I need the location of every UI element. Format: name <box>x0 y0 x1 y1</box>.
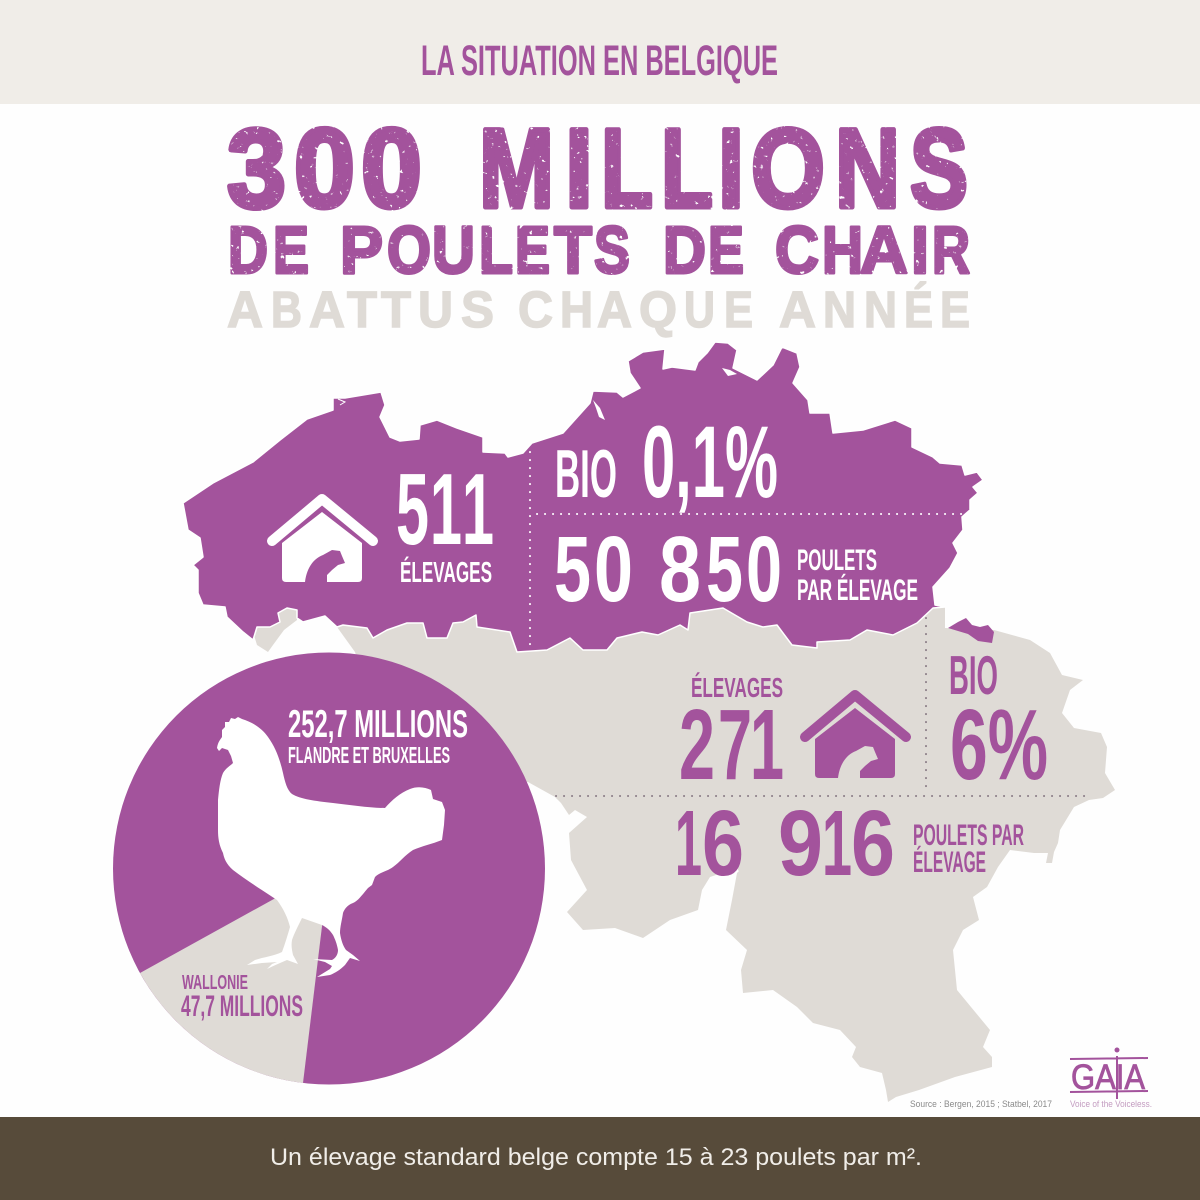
farms count: 2 <box>679 689 715 801</box>
subtitle line: A <box>309 281 345 338</box>
chickens per farm: 5 <box>554 517 591 621</box>
dotted dividers <box>556 618 1091 796</box>
chickens per farm label: ÉLEVAGE <box>913 845 986 879</box>
title lines: L <box>479 213 513 288</box>
title lines: O <box>751 106 825 231</box>
title lines: D <box>228 213 268 288</box>
logo: GAIA: Voice of the Voiceless. <box>1070 1099 1152 1109</box>
region: Comines enclave <box>253 608 297 652</box>
title lines: A <box>860 213 908 288</box>
title lines: E <box>708 213 744 288</box>
bottom banner <box>0 1117 1200 1200</box>
subtitle line: U <box>418 281 453 338</box>
title lines: R <box>932 213 970 288</box>
subtitle line: N <box>864 281 897 338</box>
subtitle line: Q <box>639 281 677 338</box>
subtitle line: A <box>779 281 816 338</box>
title lines: 0 <box>361 106 422 231</box>
chickens per farm label: PAR ÉLEVAGE <box>797 573 918 607</box>
title lines: H <box>822 213 863 288</box>
subtitle line: S <box>461 281 494 338</box>
subtitle line: A <box>227 281 263 338</box>
title lines: 0 <box>294 106 355 231</box>
island detail <box>722 368 737 376</box>
panel: Flanders statistics <box>272 405 962 646</box>
title lines: N <box>835 106 900 231</box>
title lines: L <box>661 106 713 231</box>
farms label: ÉLEVAGES <box>691 672 783 703</box>
title lines: P <box>340 213 383 288</box>
subtitle line: B <box>271 281 302 338</box>
organic label: BIO <box>555 436 617 512</box>
banner heading: LA SITUATION EN BELGIQUE <box>421 37 778 85</box>
bottom statement: Un élevage standard belge compte 15 à 23 poulets par m². <box>270 1144 922 1171</box>
icon: chicken house <box>272 499 373 582</box>
source note: Source : Bergen, 2015 ; Statbel, 2017 <box>910 1099 1052 1110</box>
chickens per farm label <box>797 544 918 607</box>
coast detail <box>338 399 345 405</box>
dotted dividers <box>530 452 962 646</box>
subtitle line: N <box>823 281 856 338</box>
title lines <box>227 106 970 288</box>
chickens per farm: 1 <box>675 791 702 895</box>
region: Wallonia <box>253 607 1115 1102</box>
top banner <box>0 0 1200 104</box>
title lines: C <box>775 213 819 288</box>
title lines: E <box>515 213 550 288</box>
title <box>227 106 970 338</box>
subtitle line: H <box>560 281 593 338</box>
subtitle line: T <box>347 281 377 338</box>
map of Belgium <box>183 342 1115 1102</box>
chickens per farm: 8 <box>659 517 701 621</box>
chickens per farm: 6 <box>702 791 744 895</box>
title lines: 3 <box>227 106 286 231</box>
organic label: BIO <box>949 644 998 706</box>
Flanders label: FLANDRE ET BRUXELLES <box>288 742 450 768</box>
region: Flanders <box>183 342 983 652</box>
title lines: L <box>601 106 653 231</box>
farms count: 1 <box>750 689 784 801</box>
chickens per farm: 1 <box>822 791 852 895</box>
subtitle line: T <box>381 281 411 338</box>
title lines: I <box>565 106 593 231</box>
title lines: E <box>273 213 309 288</box>
chickens per farm: 0 <box>746 517 782 621</box>
organic share: 6% <box>950 689 1048 801</box>
Wallonia label: WALLONIE <box>182 972 248 994</box>
chickens per farm label: POULETS PAR <box>913 819 1024 852</box>
subtitle line: E <box>940 281 970 338</box>
chickens per farm: 6 <box>851 791 895 895</box>
logo: GAIA <box>1070 1048 1152 1109</box>
subtitle line: É <box>904 281 933 338</box>
chickens per farm: 5 <box>706 517 743 621</box>
logo: GAIA: GAIA <box>1071 1058 1146 1097</box>
farms count: 5 <box>396 454 429 566</box>
title lines: I <box>718 106 744 231</box>
chickens per farm: 0 <box>594 517 633 621</box>
title lines: S <box>910 106 968 231</box>
chickens per farm label <box>913 819 1024 879</box>
organic share: 0,1% <box>642 405 778 519</box>
farms count: 7 <box>718 689 752 801</box>
subtitle line: U <box>684 281 715 338</box>
title lines: D <box>663 213 706 288</box>
pie: Wallonia slice <box>140 868 329 1083</box>
river detail <box>593 400 605 420</box>
Flanders figure: 252,7 MILLIONS <box>288 703 468 746</box>
subtitle line: A <box>597 281 632 338</box>
title lines: O <box>387 213 431 288</box>
icon: chicken house <box>805 695 906 778</box>
panel: Wallonia statistics <box>556 618 1091 895</box>
pie: Flanders and Brussels <box>113 652 545 1084</box>
title lines: U <box>432 213 475 288</box>
title lines: S <box>594 213 630 288</box>
chickens per farm: 9 <box>778 791 823 895</box>
Wallonia figure: 47,7 MILLIONS <box>181 990 303 1023</box>
pie chart <box>113 652 545 1084</box>
farms count: 1 <box>462 454 494 566</box>
subtitle line: E <box>724 281 753 338</box>
title lines: T <box>554 213 592 288</box>
farms label: ÉLEVAGES <box>400 555 492 589</box>
farms count: 1 <box>430 454 462 566</box>
title lines: M <box>479 106 554 231</box>
region: Voeren enclave <box>948 618 994 643</box>
chickens per farm label: POULETS <box>797 544 877 577</box>
title lines: I <box>911 213 929 288</box>
icon: chicken silhouette <box>217 717 445 977</box>
subtitle line: C <box>518 281 553 338</box>
